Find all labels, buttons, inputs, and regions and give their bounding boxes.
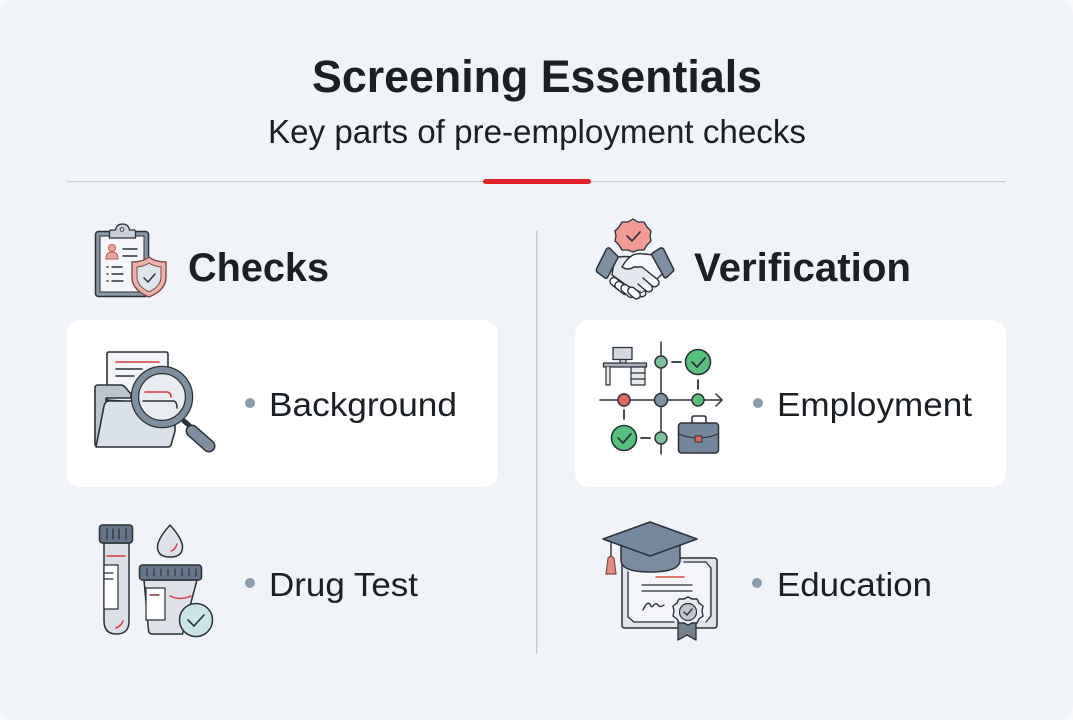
icon: career path network <box>600 342 722 454</box>
label: Background: Background <box>269 386 457 423</box>
bullet <box>753 398 763 408</box>
label: Employment: Employment <box>777 386 972 423</box>
icon: handshake with badge <box>596 219 674 300</box>
bullet <box>245 398 255 408</box>
subtitle: Key parts of pre-employment checks <box>268 113 806 150</box>
icon: clipboard with shield <box>96 224 166 297</box>
panel: background card <box>67 320 498 487</box>
panel: employment card <box>575 320 1006 487</box>
title: Screening Essentials <box>312 51 762 102</box>
icon: test tube and sample cup <box>100 525 212 636</box>
bullet <box>245 578 255 588</box>
icon: graduation cap and diploma <box>603 522 717 640</box>
label: Drug Test: Drug Test <box>269 566 418 603</box>
heading: Checks: Checks <box>188 246 329 290</box>
icon: folder with magnifier <box>95 352 209 447</box>
label: Education: Education <box>777 566 932 603</box>
red accent bar <box>483 179 591 184</box>
bullet <box>752 578 762 588</box>
heading: Verification: Verification <box>694 246 911 290</box>
